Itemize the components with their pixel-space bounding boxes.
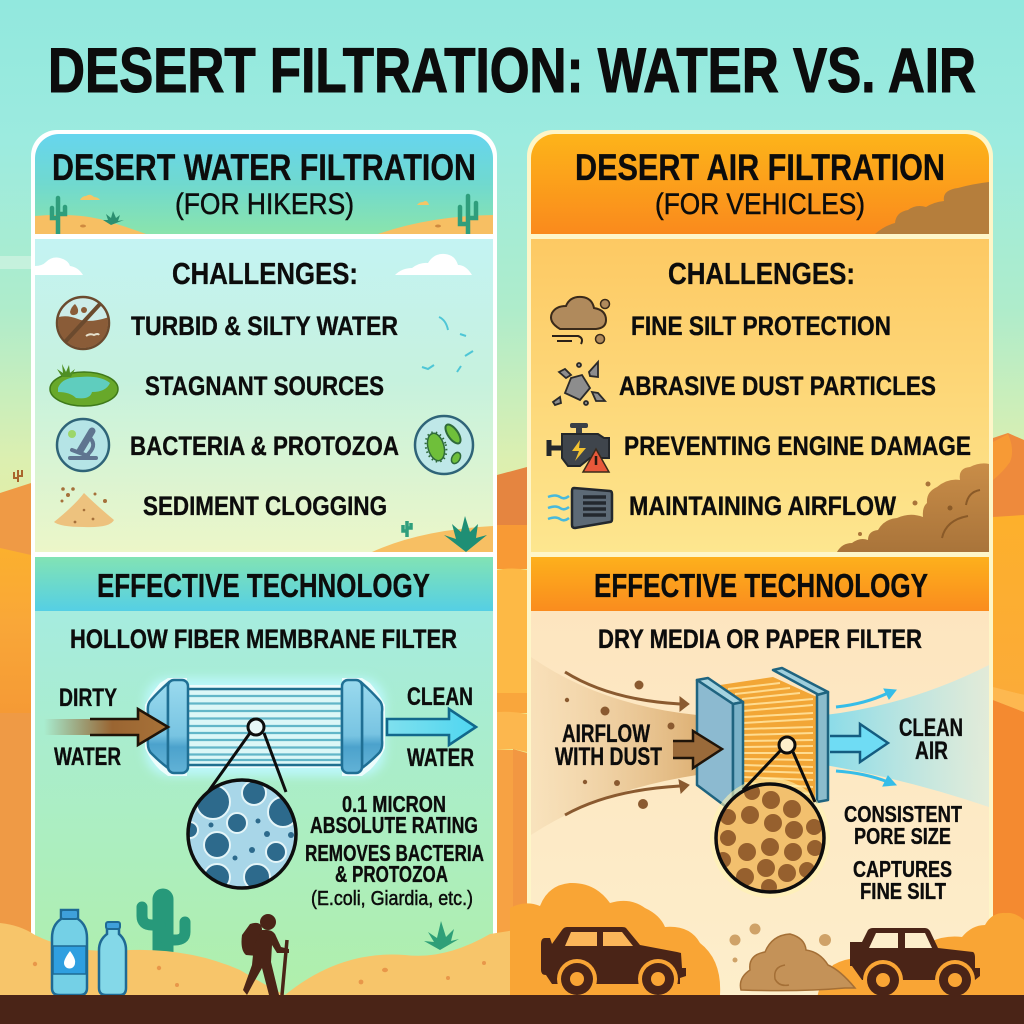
- heading: effective technology water: EFFECTIVE TECHNOLOGY: [97, 567, 430, 604]
- curved arrows: dust flow: [565, 672, 689, 815]
- icon: silt cloud: [551, 297, 610, 344]
- panel header: water: [35, 134, 493, 234]
- dust clouds: orange: [510, 883, 720, 1000]
- label: water in: WATER: [54, 743, 121, 771]
- note: captures fine silt: FINE SILT: [860, 878, 946, 904]
- note: captures fine silt: CAPTURES: [853, 856, 952, 882]
- clouds: [35, 254, 472, 275]
- diagram: air filter: [697, 668, 828, 815]
- header subtitle: water: (FOR HIKERS): [175, 188, 354, 221]
- panel: desert air filtration: [527, 130, 993, 1010]
- icon: bacteria: [415, 416, 473, 474]
- heading: challenges air: CHALLENGES:: [668, 256, 855, 291]
- section: air technology: [531, 611, 989, 1000]
- tech header: air: [531, 557, 989, 611]
- ground strip: [0, 995, 1024, 1024]
- diagram: hollow fiber filter: [145, 678, 385, 776]
- icon: turbid water: [55, 297, 112, 352]
- corner dune with plants: [372, 516, 493, 552]
- icon: sediment pile: [54, 487, 114, 527]
- label: airflow with dust: AIRFLOW: [562, 720, 650, 748]
- header title: water: DESERT WATER FILTRATION: [52, 147, 476, 188]
- section: air challenges: [531, 239, 989, 552]
- note: micron rating: [310, 791, 478, 838]
- icon: stagnant pond: [50, 364, 118, 406]
- arrow: dusty air in: [673, 731, 722, 768]
- note: micron rating: 0.1 MICRON: [342, 791, 446, 817]
- text: sediment clogging: SEDIMENT CLOGGING: [143, 491, 387, 521]
- text: turbid and silty water: TURBID & SILTY WATER: [131, 311, 398, 341]
- label: clean air: AIR: [915, 737, 948, 765]
- arrow: clean air out: [830, 724, 888, 762]
- ground scene: hikers: [0, 899, 515, 1000]
- curved arrows: clean flow: [836, 689, 896, 786]
- icon: jeep left: [541, 927, 686, 999]
- subheading: dry media: DRY MEDIA OR PAPER FILTER: [598, 624, 922, 654]
- flow: clean air: [825, 665, 989, 807]
- note: consistent pore size: CONSISTENT: [844, 801, 962, 827]
- label: water out: WATER: [407, 744, 474, 772]
- panel: desert water filtration: [31, 130, 497, 1010]
- icon: engine warning: [549, 423, 609, 472]
- arrow: dirty water in: [44, 709, 168, 745]
- magnifier: membrane pores: [182, 719, 298, 890]
- label: airflow with dust: [555, 720, 662, 771]
- label: dirty: DIRTY: [59, 684, 117, 712]
- dust particles: [565, 680, 674, 809]
- note: removes bacteria: REMOVES BACTERIA: [305, 840, 484, 866]
- note: removes bacteria: & PROTOZOA: [335, 861, 448, 887]
- section: water challenges: [35, 239, 493, 552]
- arrow: clean water out: [387, 709, 476, 745]
- note: consistent pore size: [844, 801, 962, 849]
- header title: air: DESERT AIR FILTRATION: [575, 147, 945, 188]
- flow: dusty air: [531, 657, 697, 835]
- note: consistent pore size: PORE SIZE: [854, 823, 951, 849]
- text: maintaining airflow: MAINTAINING AIRFLOW: [629, 491, 896, 521]
- panel header: air: [531, 134, 989, 234]
- magnifier: paper pores: [710, 737, 830, 898]
- cactus: [142, 899, 185, 965]
- sand dunes: left: [0, 923, 515, 1000]
- text: abrasive dust particles: ABRASIVE DUST PARTICLES: [619, 371, 936, 401]
- agave plant: [424, 921, 459, 950]
- section: water technology: [35, 611, 493, 1000]
- dust cloud: challenges: [837, 463, 989, 552]
- dust clouds: orange right: [817, 913, 1024, 1000]
- header subtitle: air: (FOR VEHICLES): [655, 188, 865, 221]
- text: bacteria and protozoa: BACTERIA & PROTOZOA: [130, 431, 399, 461]
- text: fine silt protection: FINE SILT PROTECTION: [631, 311, 891, 341]
- icon: jeep right: [850, 928, 980, 1000]
- icon: dust cloud ground: [730, 924, 855, 991]
- heading: effective technology air: EFFECTIVE TECHNOLOGY: [594, 567, 928, 604]
- dust cloud: header: [875, 182, 989, 234]
- note: removes bacteria: [305, 840, 484, 910]
- tech header: water: [35, 557, 493, 611]
- note: captures fine silt: [853, 856, 952, 904]
- arrow outline: dirty: [90, 709, 168, 745]
- text: stagnant sources: STAGNANT SOURCES: [145, 371, 384, 401]
- decorative birds: [422, 317, 473, 372]
- sand specks: [33, 961, 486, 987]
- subheading: hollow fiber: HOLLOW FIBER MEMBRANE FILTER: [70, 624, 457, 654]
- note: removes bacteria: (E.coli, Giardia, etc.): [311, 888, 473, 910]
- label: clean air: [899, 714, 963, 765]
- heading: challenges water: CHALLENGES:: [172, 256, 358, 291]
- icon: hiker: [242, 914, 289, 995]
- icon: abrasive rocks: [553, 362, 605, 405]
- ground scene: vehicles: [510, 883, 1024, 1000]
- note: micron rating: ABSOLUTE RATING: [310, 812, 478, 838]
- icon: large water bottle: [52, 910, 87, 995]
- label: clean air: CLEAN: [899, 714, 963, 742]
- label: clean: CLEAN: [407, 683, 473, 711]
- icon: airflow vent: [548, 488, 612, 528]
- icon: microscope: [57, 419, 109, 471]
- icon: small water bottle: [99, 922, 126, 995]
- label: airflow with dust: WITH DUST: [555, 743, 662, 771]
